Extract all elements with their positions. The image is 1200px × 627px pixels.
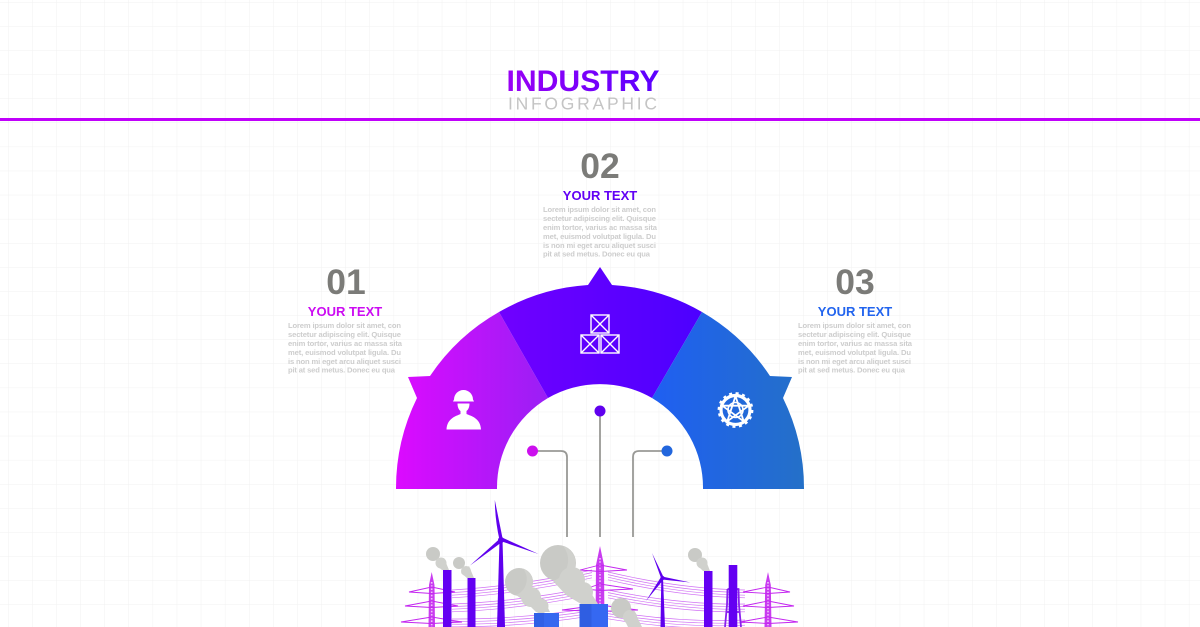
industrial skyline [401,500,798,627]
text block: 03: 03 [835,262,875,302]
blue buildings [534,604,608,627]
text block: 03 [798,262,913,374]
pylon: centre [562,546,638,627]
text block: 02 [543,146,658,258]
text block: 01: met, euismod volutpat ligula. Du [288,348,401,357]
text block: 03: YOUR TEXT [818,304,892,319]
text block: 02: is non mi eget arcu aliquet susci [543,241,656,250]
wind turbine: large [470,500,538,627]
text block: 01: sectetur adipiscing elit. Quisque [288,330,401,339]
smoke plumes [426,545,710,627]
title [506,65,660,114]
icon: crates [581,315,619,353]
icon: gear [719,393,752,427]
wind turbine: small [646,553,690,627]
text block: 03: enim tortor, varius ac massa sita [798,339,913,348]
chimneys [443,565,737,627]
text block: 03: pit at sed metus. Donec eu qua [798,366,906,374]
text block: 01: is non mi eget arcu aliquet susci [288,357,401,366]
text block: 02: pit at sed metus. Donec eu qua [543,250,651,258]
text block: 03: sectetur adipiscing elit. Quisque [798,330,911,339]
text block: 02: enim tortor, varius ac massa sita [543,223,658,232]
text block: 02: Lorem ipsum dolor sit amet, con [543,205,656,214]
text block: 01: 01 [326,262,366,302]
pylon: behind chimney [725,589,741,627]
text block: 02: YOUR TEXT [563,188,637,203]
text block: 01 [288,262,403,374]
semicircle diagram [396,267,804,489]
text block: 01: enim tortor, varius ac massa sita [288,339,403,348]
icon: worker [446,390,481,430]
title: INDUSTRY [506,65,660,98]
pylon: left [401,572,462,627]
title: INFOGRAPHIC [508,94,657,114]
text block: 01: Lorem ipsum dolor sit amet, con [288,321,401,330]
segment: right blue [652,312,804,489]
text block: 02: 02 [580,146,620,186]
segment: middle violet [499,267,702,398]
segment: left magenta [396,312,548,489]
text block: 03: met, euismod volutpat ligula. Du [798,348,911,357]
header rule [0,118,1200,121]
text block: 02: sectetur adipiscing elit. Quisque [543,214,656,223]
pylon: right [740,572,798,627]
power lines [452,570,745,627]
text block: 01: YOUR TEXT [308,304,382,319]
text block: 01: pit at sed metus. Donec eu qua [288,366,396,374]
text block: 02: met, euismod volutpat ligula. Du [543,232,656,241]
text block: 03: Lorem ipsum dolor sit amet, con [798,321,911,330]
connectors with dots [527,406,672,537]
text block: 03: is non mi eget arcu aliquet susci [798,357,911,366]
